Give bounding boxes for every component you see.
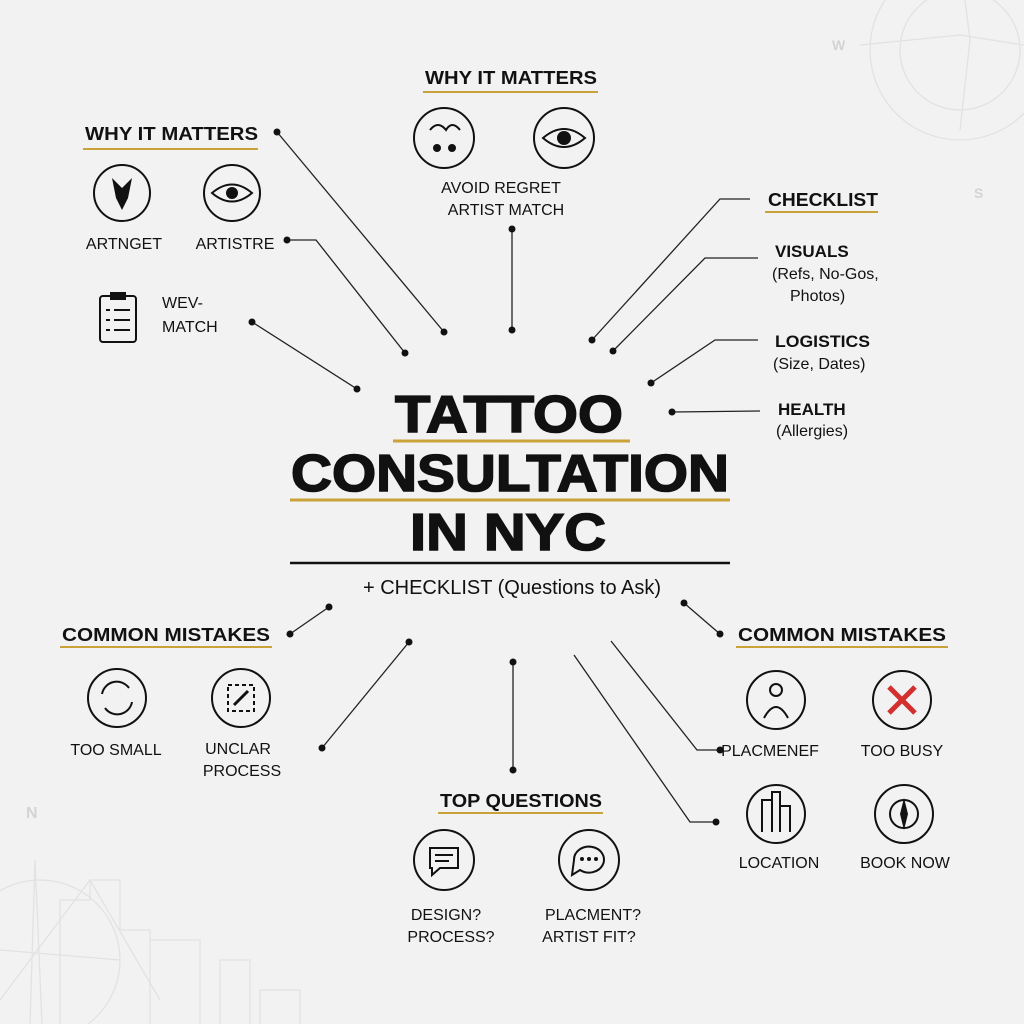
icon: refresh — [88, 669, 146, 727]
subtitle: + CHECKLIST (Questions to Ask) — [363, 577, 661, 599]
panel: why it matters (top) — [414, 68, 598, 219]
title: IN NYC — [410, 504, 606, 562]
icon: buildings — [747, 785, 805, 843]
panel: common mistakes (right): COMMON MISTAKES — [738, 625, 946, 645]
panel: top questions — [407, 791, 641, 946]
panel: common mistakes (right): PLACMENEF — [721, 743, 819, 760]
panel: why it matters (left): ARTISTRE — [196, 236, 274, 253]
icon: eye — [204, 165, 260, 221]
icon: unclear process — [212, 669, 270, 727]
panel: top questions: DESIGN? — [411, 907, 481, 924]
panel: why it matters (left): WHY IT MATTERS — [85, 124, 258, 144]
panel: top questions: TOP QUESTIONS — [440, 791, 602, 811]
panel: checklist: (Refs, No-Gos, — [772, 266, 879, 283]
panel: top questions: ARTIST FIT? — [542, 929, 636, 946]
decorative compass top-right: S — [974, 185, 983, 201]
panel: checklist: CHECKLIST — [768, 190, 878, 210]
panel: checklist: HEALTH — [778, 400, 846, 419]
decorative compass top-right — [832, 0, 1024, 201]
panel: why it matters (left): MATCH — [162, 319, 218, 336]
decorative skyline bottom-left: N — [26, 805, 38, 822]
panel: common mistakes (right): TOO BUSY — [861, 743, 944, 760]
panel: checklist: LOGISTICS — [775, 332, 870, 351]
panel: why it matters (left): ARTNGET — [86, 236, 162, 253]
icon: clipboard — [100, 292, 136, 342]
icon: compass — [875, 785, 933, 843]
panel: checklist: Photos) — [790, 288, 845, 305]
icon: message — [414, 830, 474, 890]
icon: red x — [873, 671, 931, 729]
panel: checklist: VISUALS — [775, 242, 849, 261]
connector lines — [252, 132, 760, 822]
panel: why it matters (top): WHY IT MATTERS — [425, 68, 597, 88]
panel: common mistakes (right): LOCATION — [739, 855, 819, 872]
decorative skyline bottom-left — [0, 805, 300, 1024]
panel: why it matters (left) — [83, 124, 274, 342]
panel: common mistakes (left): COMMON MISTAKES — [62, 625, 270, 645]
icon: chat bubble — [559, 830, 619, 890]
panel: checklist — [765, 190, 879, 440]
icon: regret — [414, 108, 474, 168]
icon: tattoo design — [94, 165, 150, 221]
icon: artist eye — [534, 108, 594, 168]
panel: top questions: PLACMENT? — [545, 907, 641, 924]
panel: checklist: (Size, Dates) — [773, 356, 865, 373]
panel: common mistakes (right) — [721, 625, 951, 872]
panel: checklist: (Allergies) — [776, 423, 848, 440]
panel: common mistakes (left) — [60, 625, 281, 780]
icon: placement figure — [747, 671, 805, 729]
panel: common mistakes (right): BOOK NOW — [860, 855, 951, 872]
title: TATTOO — [395, 386, 623, 444]
panel: common mistakes (left): UNCLAR — [205, 741, 271, 758]
title: CONSULTATION — [291, 445, 729, 503]
panel: common mistakes (left): TOO SMALL — [70, 742, 162, 759]
title — [290, 386, 730, 563]
panel: why it matters (top): ARTIST MATCH — [448, 202, 564, 219]
decorative compass top-right: W — [832, 37, 846, 53]
panel: common mistakes (left): PROCESS — [203, 763, 281, 780]
panel: why it matters (top): AVOID REGRET — [441, 180, 561, 197]
panel: top questions: PROCESS? — [407, 929, 495, 946]
panel: why it matters (left): WEV- — [162, 295, 203, 312]
